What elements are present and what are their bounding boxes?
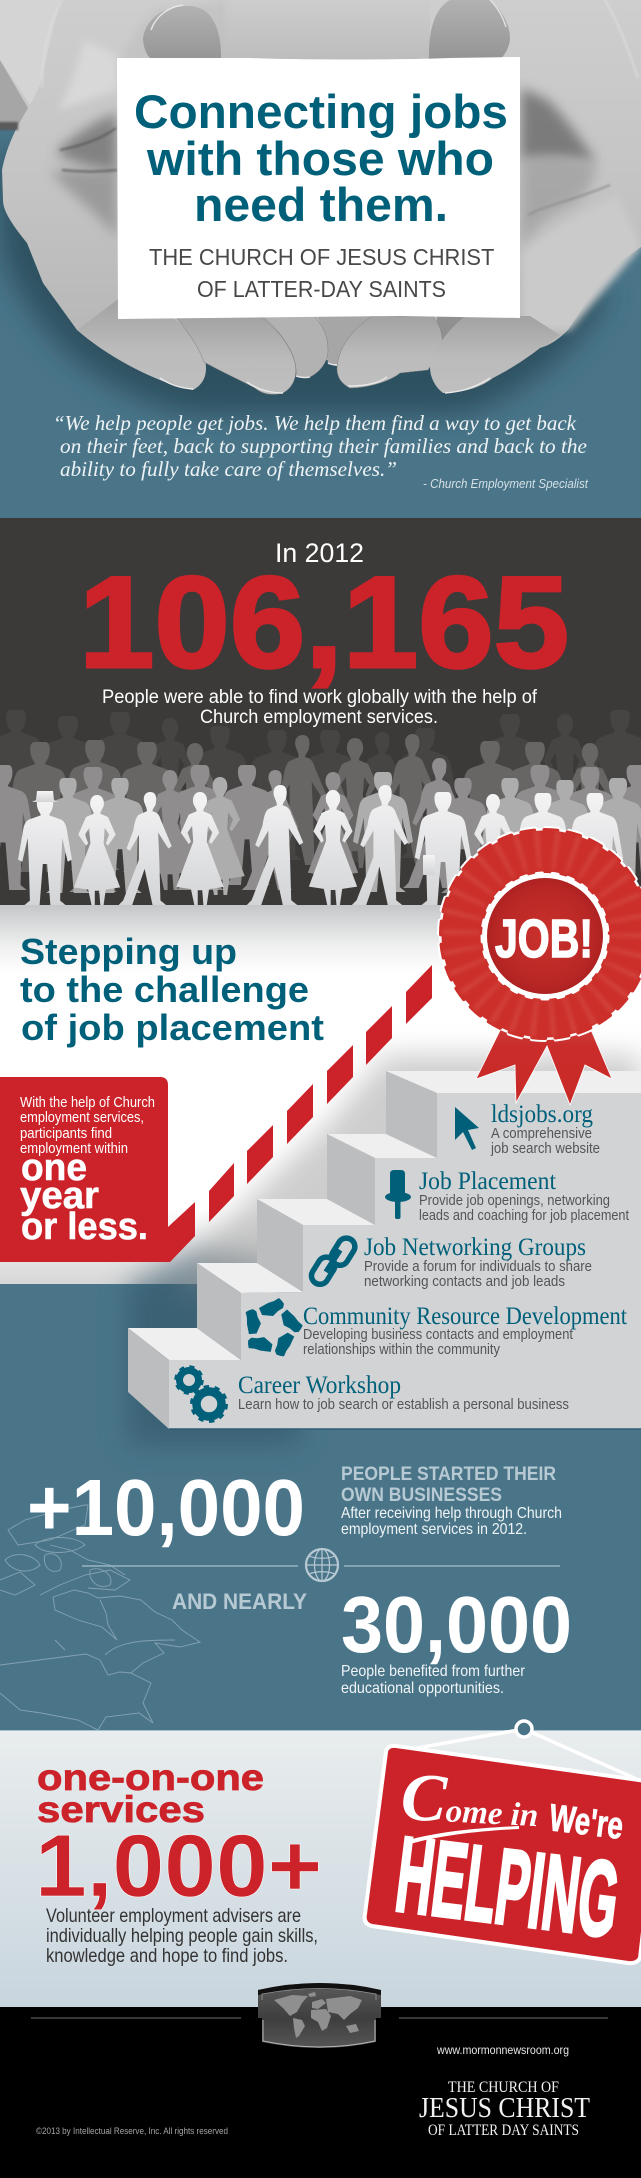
description: Volunteer employment advisers are: [46, 1905, 301, 1927]
step: job networking groups: networking contacts and job leads: [364, 1274, 565, 1290]
panel: businesses and education: [0, 1429, 641, 1730]
callout: one year or less: year: [20, 1175, 99, 1217]
subtitle: OF LATTER-DAY SAINTS: [197, 276, 446, 302]
quote: ability to fully take care of themselves.”: [60, 457, 397, 481]
step: career workshop: Learn how to job search or establish a personal business: [238, 1397, 569, 1413]
label: JOB!: JOB!: [495, 909, 593, 969]
step: job placement: Job Placement: [419, 1168, 556, 1195]
stat: +10,000: +10,000: [27, 1463, 305, 1552]
callout: one year or less: or less.: [21, 1206, 148, 1248]
left palm creases: [56, 112, 117, 172]
step: job placement: [385, 1168, 629, 1224]
callout: one year or less: With the help of Church: [20, 1095, 155, 1111]
title: Connecting jobs: [134, 86, 508, 139]
step: ldsjobs.org: A comprehensive: [491, 1126, 592, 1142]
map outline: [0, 1505, 200, 1730]
quote: “We help people get jobs. We help them find a way to get back: [53, 411, 577, 435]
step: community resource development: relationships within the community: [303, 1342, 501, 1358]
callout: one year or less: participants find: [20, 1126, 112, 1142]
step: career workshop: Career Workshop: [238, 1372, 401, 1399]
world map plaque: [258, 1983, 381, 2048]
panel: footer: [0, 1983, 641, 2178]
text: people started their own businesses: PEOPLE STARTED THEIR: [341, 1464, 556, 1485]
step: job networking groups: Job Networking Groups: [364, 1234, 586, 1261]
panel: 2012 total: [0, 518, 641, 906]
subtitle: THE CHURCH OF JESUS CHRIST: [149, 244, 494, 270]
title: need them.: [194, 179, 448, 232]
hanging sign: [365, 1721, 641, 1963]
text: people started their own businesses: OWN BUSINESSES: [341, 1485, 502, 1506]
callout: one year or less: employment within: [20, 1141, 128, 1157]
callout: one year or less: [0, 1077, 195, 1262]
fingers: [437, 316, 465, 350]
description: Church employment services.: [200, 707, 438, 728]
rosette ribbon: [439, 828, 641, 1105]
step: career workshop: [176, 1367, 569, 1421]
heading: Stepping up: [20, 931, 237, 972]
callout: one year or less: employment services,: [20, 1110, 144, 1126]
divider with globe: [82, 1549, 560, 1581]
panel: stepping up: [0, 828, 641, 1731]
step: job networking groups: Provide a forum for individuals to share: [364, 1259, 592, 1275]
stat: 30,000: 30,000: [341, 1580, 572, 1669]
quote: on their feet, back to supporting their families and back to the: [60, 434, 587, 458]
heading: services: [37, 1789, 205, 1830]
crowd silhouettes: [0, 710, 641, 905]
step: ldsjobs.org: ldsjobs.org: [491, 1101, 593, 1128]
heading: to the challenge: [20, 969, 309, 1010]
dashed arrow: [209, 965, 432, 1222]
thumbs: [120, 0, 225, 66]
logo text: THE CHURCH OF: [448, 2079, 559, 2096]
text: people started their own businesses: After receiving help through Church: [341, 1505, 562, 1522]
title card: [117, 57, 521, 319]
panel: hero photo: [0, 0, 641, 519]
step: community resource development: [239, 1298, 627, 1360]
step: community resource development: Developing business contacts and employment: [303, 1327, 573, 1343]
description: individually helping people gain skills,: [46, 1925, 318, 1947]
description: People were able to find work globally with the help of: [102, 687, 538, 708]
description: knowledge and hope to find jobs.: [46, 1945, 288, 1967]
panel: one-on-one services: [0, 1721, 641, 2008]
text: further education: People benefited from further: [341, 1663, 526, 1680]
sign text: [390, 1758, 625, 1960]
website: www.mormonnewsroom.org: [436, 2045, 569, 2057]
big number: 106,165: [79, 549, 569, 695]
logo text: OF LATTER DAY SAINTS: [428, 2122, 579, 2139]
hands shadow: [0, 150, 610, 415]
step: ldsjobs.org: job search website: [490, 1141, 600, 1157]
text: and nearly: AND NEARLY: [172, 1589, 307, 1614]
callout: one year or less: one: [21, 1147, 87, 1189]
text: further education: educational opportunities.: [341, 1680, 504, 1697]
copyright: ©2013 by Intellectual Reserve, Inc. All rights reserved: [36, 2126, 228, 2137]
quote: [53, 411, 592, 491]
stat: 1,000+: 1,000+: [35, 1816, 322, 1915]
text: people started their own businesses: employment services in 2012.: [341, 1521, 527, 1538]
hands photo illustration: [0, 0, 641, 394]
logo text: JESUS CHRIST: [419, 2093, 590, 2124]
step: job networking groups: [308, 1234, 596, 1290]
right palm creases: [521, 88, 596, 162]
heading: In 2012: In 2012: [275, 538, 364, 568]
step: ldsjobs.org: [455, 1101, 600, 1157]
sign text: Come in: [399, 1758, 541, 1841]
heading: of job placement: [21, 1007, 324, 1048]
step: job placement: Provide job openings, networking: [419, 1193, 610, 1209]
text: people started their own businesses: [341, 1464, 566, 1538]
quote: - Church Employment Specialist: [423, 477, 588, 491]
title: with those who: [146, 133, 494, 186]
staircase: [128, 1071, 641, 1429]
heading: one-on-one: [37, 1757, 264, 1798]
